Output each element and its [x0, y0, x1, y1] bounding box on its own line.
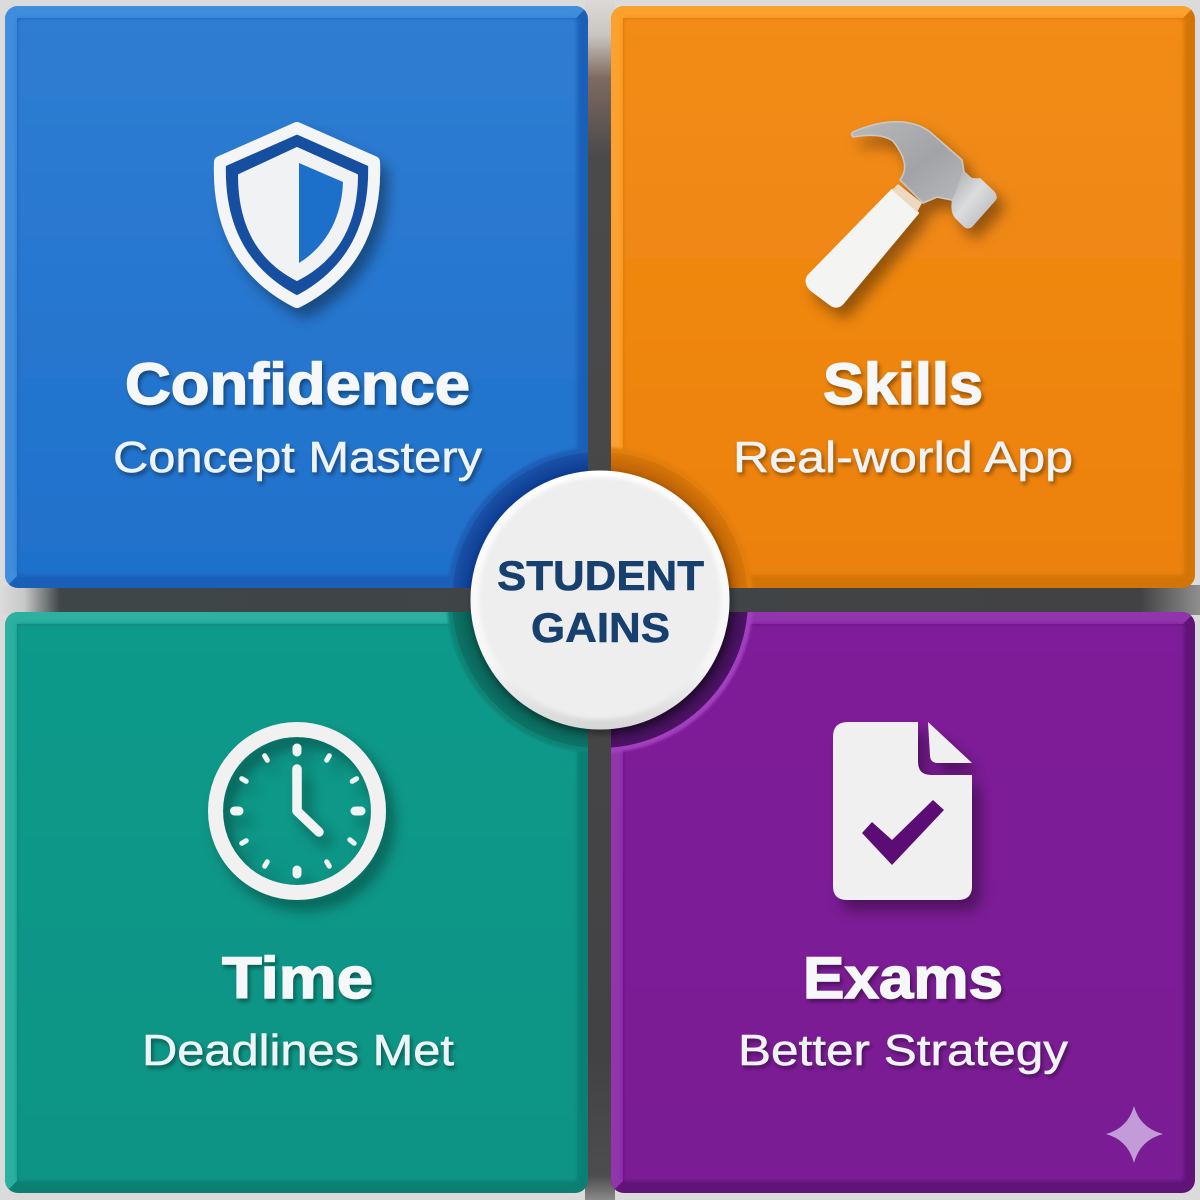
subheading: Concept Mastery: Concept Mastery	[113, 433, 482, 482]
subheading: Deadlines Met: Deadlines Met	[142, 1026, 454, 1075]
heading: Skills: Skills	[823, 352, 983, 417]
panel: time	[5, 612, 588, 1193]
icon: hammer	[807, 122, 997, 307]
icon: shield	[220, 128, 374, 302]
badge label: GAINS: GAINS	[531, 604, 670, 651]
icon: sparkle	[1106, 1106, 1163, 1163]
center badge: student gains	[470, 470, 730, 730]
icon: document with check	[833, 722, 972, 900]
panel: confidence	[5, 6, 588, 588]
subheading: Better Strategy: Better Strategy	[738, 1026, 1068, 1075]
icon: clock	[216, 730, 378, 892]
panel: skills	[611, 6, 1195, 588]
heading: Exams: Exams	[803, 946, 1003, 1011]
badge label: STUDENT: STUDENT	[497, 552, 704, 599]
heading: Time: Time	[222, 946, 373, 1011]
subheading: Real-world App: Real-world App	[733, 433, 1073, 482]
panel: exams	[611, 612, 1195, 1193]
heading: Confidence: Confidence	[125, 352, 470, 417]
